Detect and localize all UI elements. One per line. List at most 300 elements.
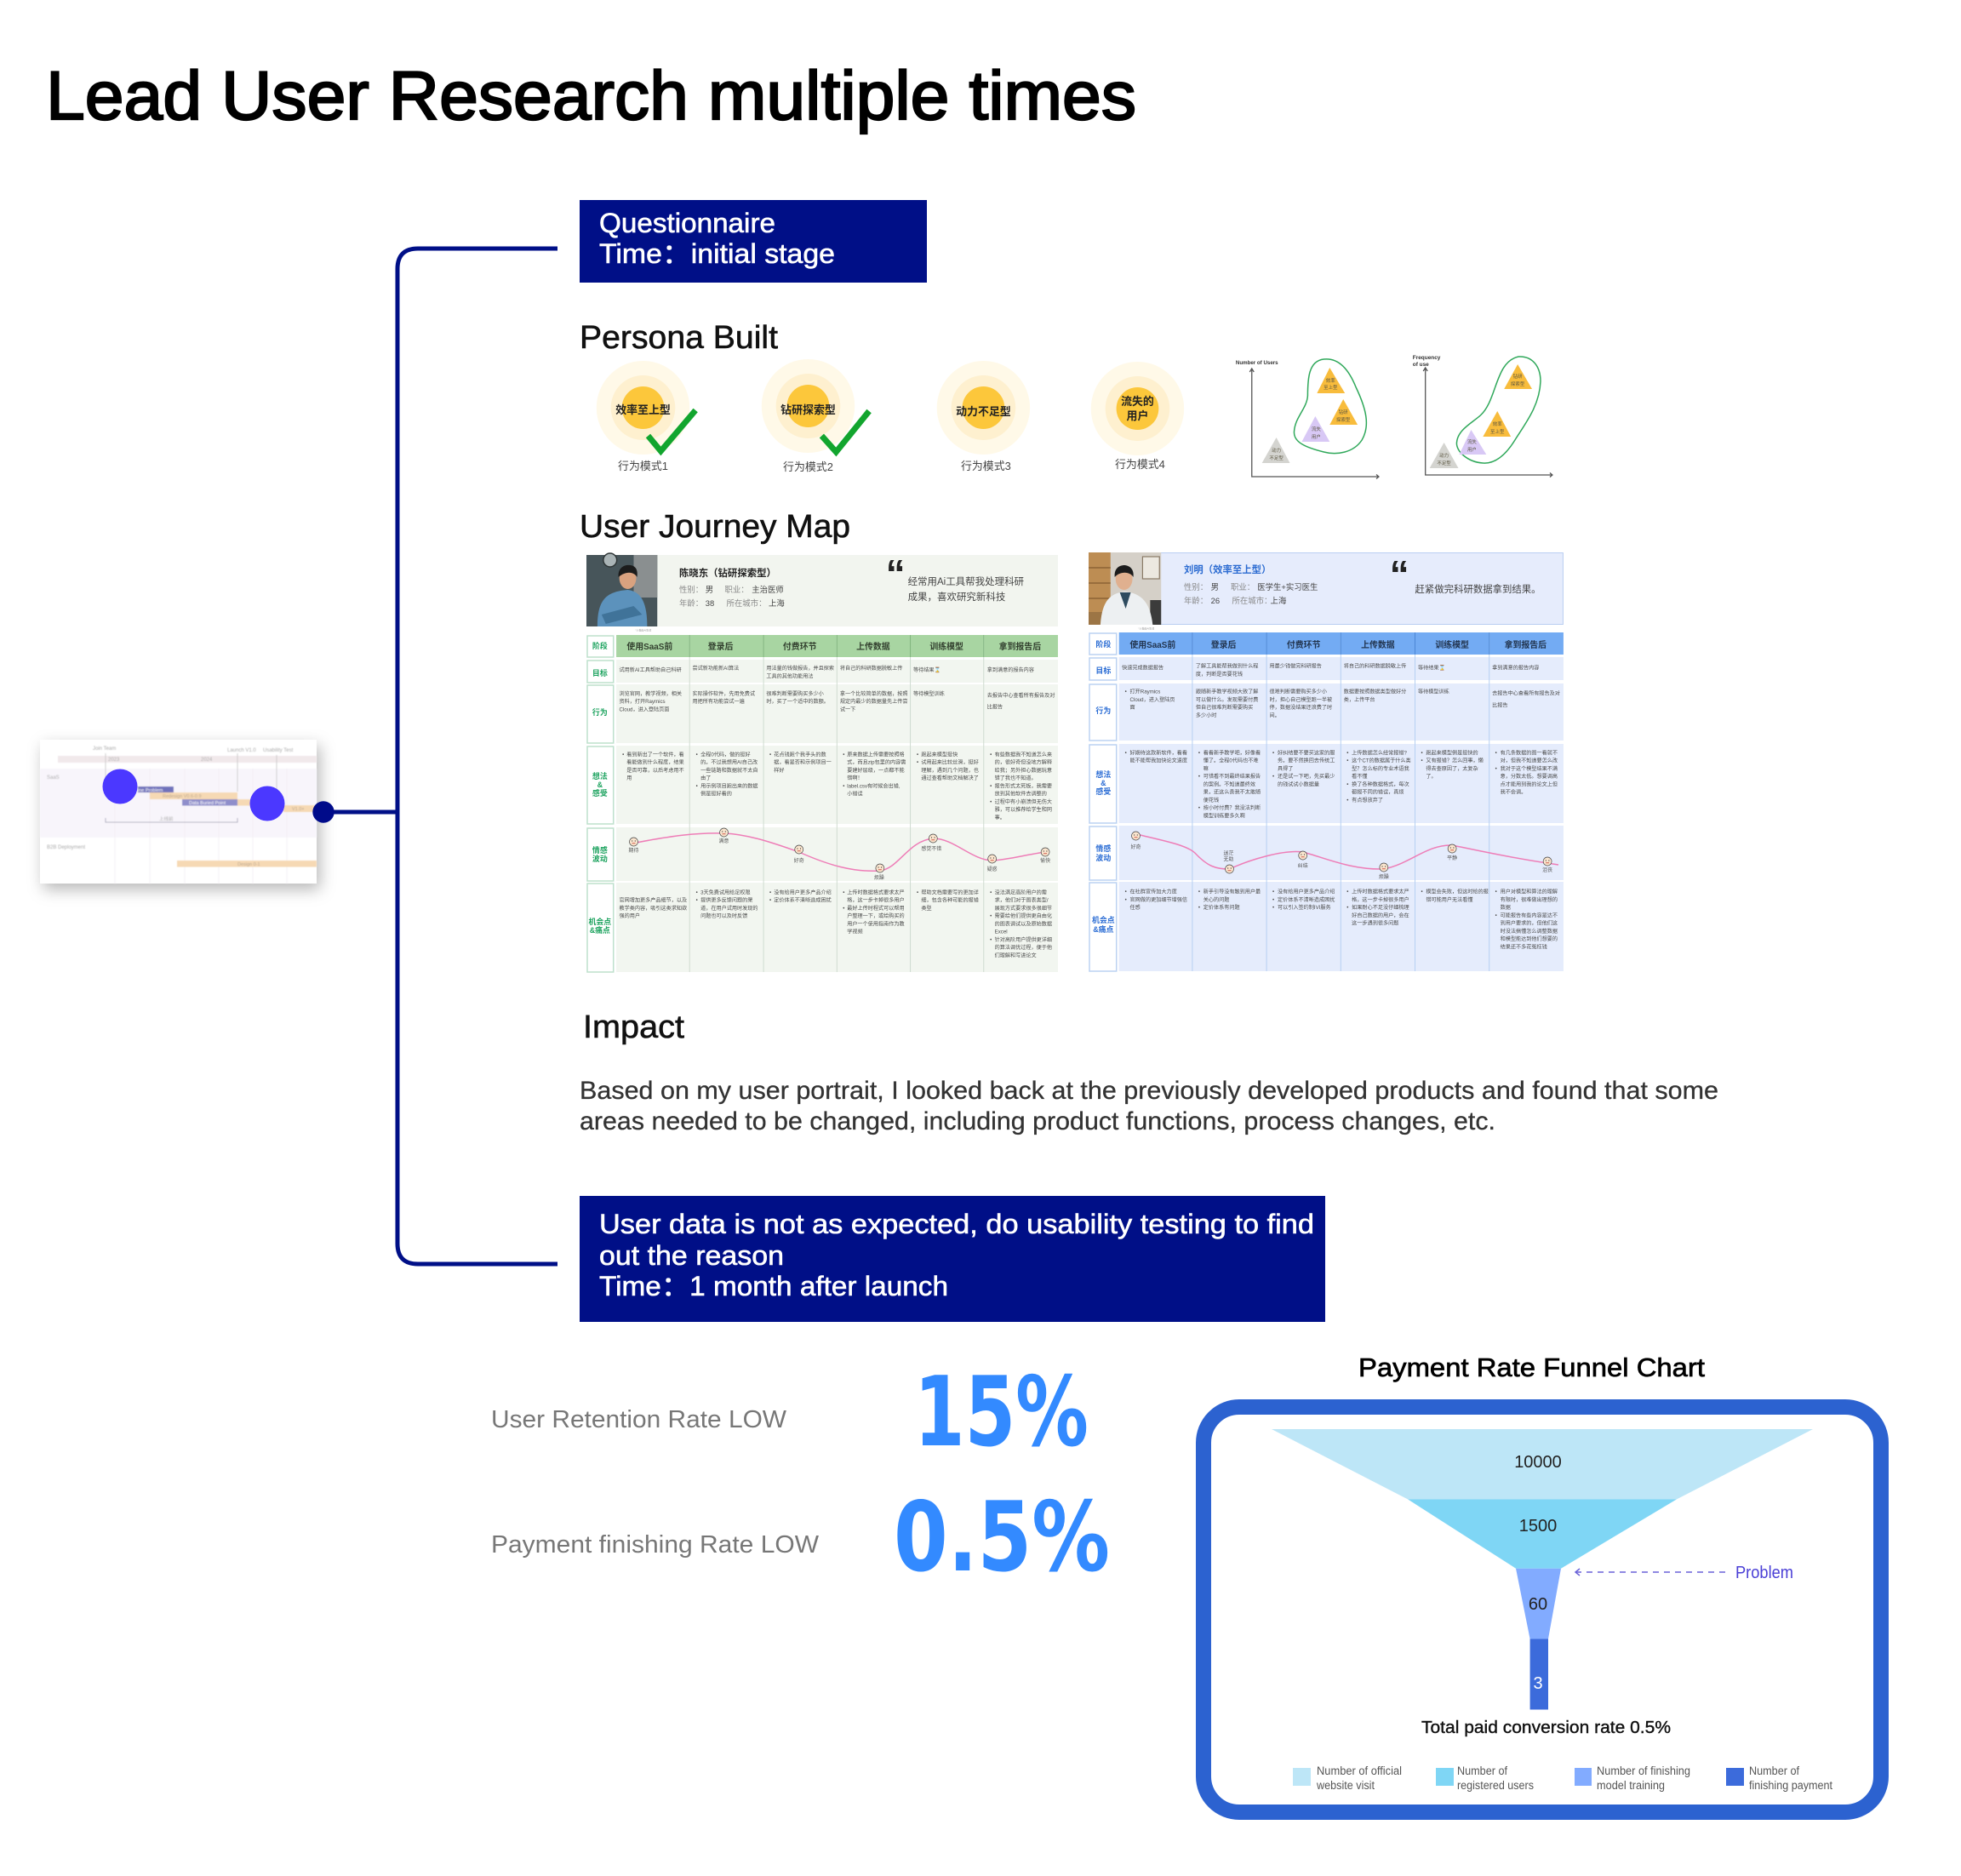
- row labels: 感受: [1095, 786, 1111, 796]
- persona badges: 流失的: [1121, 395, 1154, 408]
- behaviour row: 停，数据没结果还浪费了时: [1270, 704, 1332, 711]
- emotion curve: 期待: [629, 847, 638, 854]
- row labels: &: [597, 781, 603, 789]
- opportunities row: 数据: [1501, 904, 1511, 911]
- timeline thumbnail: Data Buried Point: [189, 801, 226, 806]
- goals row: 试用新AI工具帮助自己科研: [619, 666, 682, 673]
- thoughts row: 我不会调。: [1501, 789, 1526, 796]
- thoughts row: 有几条数据的图一看就不: [1501, 749, 1558, 756]
- opportunities row: •: [1272, 905, 1274, 911]
- behaviour row: [1125, 689, 1560, 719]
- thoughts row: 看看新手教学吧，好像看: [1203, 749, 1261, 756]
- emotion curve: 愉快: [1040, 857, 1050, 864]
- chart: number of users: 用户: [1312, 433, 1321, 440]
- chart: number of users: 钻研: [1339, 409, 1348, 415]
- thoughts row: •: [1272, 774, 1274, 780]
- funnel segments: 60: [1529, 1595, 1547, 1614]
- thoughts row: [1125, 749, 1558, 819]
- behaviour row: Cloud，进入登陆页: [1130, 696, 1175, 703]
- column headers: 训练模型: [1435, 639, 1469, 650]
- thoughts row: 果，还这么贵我不太敢随: [1203, 789, 1261, 796]
- legend: Number of finishing: [1597, 1764, 1690, 1777]
- opportunities row: 如果耐心不足没仔细梳理: [1352, 904, 1409, 911]
- opportunities row: •: [1272, 889, 1274, 895]
- thoughts row: 给我；另外担心数据玩意: [995, 767, 1052, 774]
- column headers: 登录后: [1211, 639, 1236, 650]
- opportunities row: 类型: [921, 905, 932, 912]
- opportunities row: •: [696, 889, 698, 895]
- opportunities row: 3天免费试用给足权限: [700, 889, 751, 895]
- behaviour row: 很难判断需要购买多少小: [766, 690, 824, 697]
- row labels: 情感: [1095, 844, 1111, 853]
- opportunities row: 格，这一步卡掉很多用户: [847, 896, 905, 904]
- persona badges: 钻研探索型: [780, 403, 836, 416]
- thoughts row: 看能做到什么程度，结果: [626, 758, 684, 766]
- journey table grid: [1089, 632, 1564, 971]
- title: Lead User Research multiple times: [46, 58, 1136, 134]
- thoughts row: 意，分数太低。想要调高: [1501, 773, 1558, 780]
- emotion curve: 沮丧: [1542, 867, 1552, 873]
- thoughts row: 有点想放弃了: [1352, 797, 1383, 804]
- opportunities row: •: [1421, 889, 1423, 895]
- persona badges: 行为模式4: [1115, 458, 1165, 471]
- opportunities row: 在社群宣传加大力度: [1130, 889, 1177, 895]
- goals row: 用法量的钱做报告，并且探索: [766, 665, 834, 672]
- emotion curve: 疑惑: [987, 866, 998, 872]
- behaviour row: 等待模型训练: [913, 690, 945, 697]
- row labels: 想法: [1095, 769, 1111, 779]
- goals row: 拿到满意的报告内容: [987, 666, 1034, 673]
- persona header: Chen Xiaodong: 主治医师: [752, 585, 784, 595]
- thoughts row: 用: [626, 775, 632, 781]
- journey map: blue persona: [1089, 552, 1564, 971]
- impact paragraph: [580, 1077, 1718, 1135]
- goals row: 将自己的科研数据脱敏上传: [1344, 663, 1406, 670]
- thoughts row: 能不能帮我加快论文速度: [1130, 758, 1187, 764]
- chart: frequency of use: 流失: [1467, 438, 1477, 445]
- chart: number of users: 不足型: [1269, 455, 1284, 461]
- thoughts row: 放到其他软件去调整的: [995, 790, 1047, 798]
- thoughts row: •: [1495, 750, 1497, 756]
- opportunities row: 上传时数据格式要求太严: [847, 889, 905, 895]
- opportunities row: •: [990, 937, 992, 943]
- funnel segments: 10000: [1514, 1453, 1562, 1472]
- thoughts row: 好纠结要不要买这家的服: [1278, 749, 1335, 756]
- persona header: Chen Xiaodong: “: [886, 552, 906, 596]
- timeline thumbnail: Usability Test: [263, 748, 294, 753]
- behaviour row: 间。: [1270, 712, 1280, 719]
- timeline thumbnail: Join Team: [93, 746, 116, 752]
- persona header: Chen Xiaodong: 成果，喜欢研究新科技: [908, 591, 1006, 603]
- persona header: Chen Xiaodong: 职业：: [725, 586, 749, 595]
- opportunities row: 官网做的更加细节增强信: [1130, 896, 1187, 903]
- thoughts row: [622, 751, 1052, 821]
- row labels: [589, 641, 611, 935]
- row labels: &: [1101, 779, 1106, 787]
- column headers: 拿到报告后: [1505, 639, 1547, 650]
- behaviour row: 打开Raymics: [1130, 689, 1160, 695]
- timeline thumbnail: V1.0+: [292, 807, 305, 812]
- persona header: Chen Xiaodong: *人像由AI生成: [635, 627, 651, 632]
- persona badges: [597, 359, 1184, 473]
- chart: frequency of use: 探索型: [1511, 380, 1525, 387]
- opportunities row: 时没法搞懂怎么调整数据: [1501, 928, 1558, 935]
- row labels: 目标: [1095, 666, 1111, 675]
- goals row: 尝试新功能新AI算法: [692, 665, 739, 672]
- callout: usability testing: [580, 1196, 1325, 1322]
- timeline thumbnail: Redesign V0.6-0.9: [163, 794, 202, 799]
- funnel segments: [1272, 1429, 1813, 1709]
- behaviour row: 试一下: [840, 706, 855, 712]
- persona header: Chen Xiaodong: 所在城市：: [727, 598, 766, 609]
- emotion curve: 无助: [1224, 855, 1233, 863]
- thoughts row: 了。: [1426, 774, 1437, 780]
- thoughts row: label.csv有时候会出错,: [847, 782, 900, 789]
- row labels: 波动: [592, 854, 608, 863]
- column headers: 使用SaaS前: [1129, 639, 1175, 650]
- persona header: Chen Xiaodong: 年龄：: [679, 598, 703, 609]
- thoughts row: 看到新出了一个软件，看: [626, 751, 684, 758]
- thoughts row: 过程中有小崩溃但无伤大: [995, 798, 1052, 805]
- goals row: 将自己的科研数据脱敏上传: [840, 665, 902, 672]
- callout: usability testing: User data is not as expected, do usability testing to find: [599, 1209, 1314, 1239]
- legend: Number of official: [1317, 1764, 1402, 1777]
- persona badges: 行为模式2: [783, 460, 833, 473]
- behaviour row: 多少小时: [1196, 712, 1216, 719]
- behaviour row: 浏览官网，教学视频，相关: [619, 690, 682, 697]
- goals row: [1122, 663, 1539, 678]
- opportunities row: 细，包含各种可能的报错: [921, 896, 979, 904]
- persona badges: 用户: [1127, 409, 1148, 422]
- opportunities row: 需要给他们提供更自由化: [995, 912, 1052, 919]
- opportunities row: •: [769, 889, 771, 895]
- row labels: 目标: [592, 668, 608, 678]
- behaviour row: 面: [1130, 705, 1135, 711]
- behaviour row: 资料，打开Raymics: [619, 698, 666, 705]
- thoughts row: •: [1421, 750, 1423, 756]
- opportunities row: [619, 889, 1052, 958]
- callout: questionnaire: Time：initial stage: [599, 238, 835, 269]
- timeline thumbnail: Launch V1.0: [227, 748, 256, 753]
- impact paragraph: Based on my user portrait, I looked back at the previously developed products and found that some: [580, 1077, 1718, 1105]
- row labels: 行为: [1095, 706, 1111, 715]
- behaviour row: 类，上传平台: [1344, 696, 1375, 703]
- thoughts row: 型？怎么标的专业术语我: [1352, 765, 1409, 772]
- journey map: green persona: [586, 552, 1058, 972]
- thoughts row: 看不懂: [1352, 773, 1368, 780]
- thoughts row: 小错误: [847, 790, 863, 798]
- thoughts row: •: [843, 752, 844, 758]
- thoughts row: 还是试一下吧，先买最少: [1278, 773, 1335, 780]
- persona badges: 行为模式3: [961, 460, 1011, 472]
- persona header: Liu Ming: 男: [1211, 583, 1219, 592]
- legend: Number of: [1749, 1764, 1799, 1777]
- thoughts row: 上传数据怎么经常报错?: [1352, 749, 1407, 756]
- legend: registered users: [1457, 1779, 1534, 1792]
- persona header: Liu Ming: 医学生+实习医生: [1257, 582, 1318, 592]
- chart: frequency of use: Frequency: [1413, 355, 1441, 361]
- persona header: Liu Ming: 上海: [1271, 596, 1287, 606]
- behaviour row: 可以做什么。发现需要付费: [1196, 696, 1258, 703]
- thoughts row: •: [1346, 750, 1348, 756]
- behaviour row: 时，担心自己模型跑一半被: [1270, 696, 1332, 703]
- emotion curve: 平静: [1447, 855, 1457, 861]
- row labels: &痛点: [590, 925, 610, 935]
- opportunities row: 学视频: [847, 928, 863, 935]
- callout: usability testing: out the reason: [599, 1240, 784, 1271]
- row labels: 想法: [592, 771, 608, 781]
- stat: user retention: [491, 1356, 1089, 1468]
- thoughts row: 这个CT的数据属于什么类: [1352, 758, 1411, 764]
- row labels: 机会点: [589, 917, 611, 926]
- behaviour row: •: [1125, 689, 1127, 695]
- thoughts row: 全程0代码，做的挺好: [700, 751, 751, 758]
- row labels: 机会点: [1092, 915, 1115, 924]
- opportunities row: •: [696, 897, 698, 904]
- thoughts row: 点才能用到我的论文上但: [1501, 781, 1558, 787]
- opportunities row: 错可能用户无法看懂: [1426, 896, 1473, 903]
- opportunities row: 上传时数据格式要求太严: [1352, 889, 1409, 895]
- goals row: [619, 665, 1034, 679]
- opportunities row: •: [1198, 905, 1200, 911]
- thoughts row: 跑起来模型挺快: [921, 751, 958, 758]
- chart: frequency of use: [1413, 355, 1552, 477]
- thoughts row: 据，看是否和示例项目一: [774, 758, 832, 766]
- thoughts row: 式，而且zip包里的内容需: [847, 758, 906, 766]
- opportunities row: 没法满足高阶用户的需: [995, 889, 1047, 895]
- problem annotation: [1575, 1564, 1793, 1582]
- column headers: 使用SaaS前: [626, 641, 672, 652]
- emotion curve: 迷茫: [1224, 849, 1233, 857]
- emotion curve: 烦躁: [874, 874, 884, 881]
- timeline thumbnail: SaaS: [47, 775, 60, 781]
- chart: number of users: 探索型: [1336, 416, 1351, 423]
- thoughts row: •: [1198, 805, 1200, 811]
- goals row: 用最少钱做完科研报告: [1270, 663, 1322, 670]
- thoughts row: 花点钱跑个我手头的数: [774, 751, 826, 758]
- opportunities row: 的图表调试以及原始数据: [995, 920, 1052, 927]
- behaviour row: 跟随新手教学视频大致了解: [1196, 689, 1258, 695]
- callout: questionnaire: Questionnaire: [599, 208, 775, 238]
- timeline thumbnail: 上线前: [159, 815, 174, 822]
- thoughts row: 换了各种数据格式，每次: [1352, 781, 1409, 787]
- persona badges: 行为模式1: [618, 460, 668, 472]
- thoughts row: 得去查原因了，太复杂: [1426, 765, 1478, 772]
- heading: user journey map: User Journey Map: [580, 509, 850, 545]
- persona badges: 动力不足型: [956, 405, 1011, 418]
- column headers: 付费环节: [783, 641, 817, 652]
- thoughts row: 又有报错？怎么回事，懒: [1426, 758, 1484, 764]
- opportunities row: 有限时，很难做出理想的: [1501, 896, 1558, 903]
- stat: payment finishing: 0.5%: [894, 1481, 1110, 1593]
- column headers: 上传数据: [1361, 639, 1395, 650]
- opportunities row: 户整理一下，或给购买的: [847, 912, 905, 919]
- thoughts row: •: [696, 783, 698, 789]
- opportunities row: 定价体系不清晰造成困扰: [774, 896, 832, 904]
- opportunities row: •: [1346, 889, 1348, 895]
- opportunities row: •: [990, 913, 992, 919]
- opportunities row: 们理解和写进论文: [995, 952, 1037, 958]
- opportunities row: •: [1495, 889, 1497, 895]
- behaviour row: [619, 690, 1055, 712]
- thoughts row: 的，很好奇但没地方解释: [995, 758, 1052, 766]
- persona header: Chen Xiaodong: [586, 552, 1058, 632]
- goals row: 拿到满意的报告内容: [1492, 665, 1539, 672]
- funnel segments: 3: [1533, 1674, 1543, 1693]
- persona header: Chen Xiaodong: 性别：: [679, 585, 703, 595]
- thoughts row: 按小时付费？我没法判断: [1203, 804, 1261, 811]
- column headers: 登录后: [708, 641, 733, 652]
- chart: number of users: 流失: [1312, 426, 1321, 432]
- thoughts row: 事。: [995, 814, 1005, 821]
- behaviour row: 规定内最少的数据量先上传尝: [840, 698, 908, 705]
- persona badges: 效率至上型: [615, 403, 671, 416]
- behaviour row: Cloud，进入登陆页面: [619, 706, 669, 712]
- behaviour row: 但自己很难判断需要购买: [1196, 704, 1253, 711]
- thoughts row: 报告形式太死板，我需要: [995, 782, 1052, 789]
- chart: number of users: 动力: [1272, 447, 1281, 454]
- behaviour row: 时，买了一个适中的数额。: [766, 698, 829, 705]
- column headers: 上传数据: [856, 641, 890, 652]
- thoughts row: •: [1346, 758, 1348, 764]
- thoughts row: •: [1346, 798, 1348, 804]
- stat: user retention: User Retention Rate LOW: [491, 1406, 787, 1433]
- chart: frequency of use: 效率: [1493, 420, 1502, 427]
- behaviour row: 去报告中心查看所有报告及对: [1492, 690, 1560, 697]
- thoughts row: 的案例。不知道最终效: [1203, 781, 1255, 787]
- behaviour row: 比报告: [1492, 701, 1508, 708]
- goals row: 快速完成数据报告: [1122, 665, 1163, 672]
- persona header: Liu Ming: 刘明（效率至上型）: [1184, 563, 1271, 575]
- chart: number of users: Number of Users: [1236, 360, 1278, 366]
- opportunities row: 到用户要求的，但他们这: [1501, 920, 1558, 927]
- emotion curve: [1131, 832, 1558, 880]
- opportunities row: 用户对模型和算法的理解: [1501, 889, 1558, 895]
- thoughts row: •: [622, 752, 624, 758]
- column headers: 训练模型: [929, 641, 963, 652]
- legend: website visit: [1316, 1779, 1375, 1792]
- chart: frequency of use: 动力: [1439, 452, 1449, 459]
- behaviour row: 实际操作软件，先用免费试: [692, 690, 755, 697]
- persona header: Chen Xiaodong: 上海: [769, 598, 785, 609]
- thoughts row: •: [769, 752, 771, 758]
- behaviour row: 数据要按照数据类型做好分: [1344, 689, 1406, 695]
- thoughts row: 对，但我不知道要怎么改: [1501, 758, 1558, 764]
- opportunities row: 和模型能达到他们想要的: [1501, 935, 1558, 942]
- emotion curve: 感觉不错: [921, 845, 941, 852]
- thoughts row: 有些数据我不知道怎么来: [995, 751, 1052, 758]
- thoughts row: •: [990, 799, 992, 805]
- timeline thumbnail: B2B Deployment: [47, 845, 85, 850]
- chart: number of users: 至上型: [1324, 384, 1338, 391]
- thoughts row: •: [1495, 766, 1497, 772]
- opportunities row: •: [769, 897, 771, 904]
- heading: persona built: Persona Built: [580, 320, 778, 356]
- opportunities row: 没有给用户更多产品介绍: [774, 889, 832, 895]
- opportunities row: 针对高阶用户提供更详细: [995, 936, 1052, 943]
- persona header: Liu Ming: “: [1390, 553, 1409, 597]
- opportunities row: 可以引入签约制IVI服务: [1278, 904, 1331, 911]
- timeline thumbnail: [40, 740, 334, 884]
- behaviour row: 用把所有功能尝试一遍: [692, 698, 745, 705]
- persona header: Liu Ming: 年龄：: [1184, 596, 1208, 606]
- opportunities row: 强的用户: [619, 912, 640, 919]
- legend: [1293, 1764, 1832, 1792]
- thoughts row: 务。要不然换回去传统工: [1278, 758, 1335, 764]
- opportunities row: 可能报告有些内容是达不: [1501, 912, 1558, 918]
- opportunities row: 没有给用户更多产品介绍: [1278, 889, 1335, 895]
- thoughts row: 错了我也不知道。: [995, 775, 1037, 781]
- persona header: Chen Xiaodong: 陈晓东（钻研探索型）: [679, 567, 776, 579]
- opportunities row: •: [1125, 897, 1127, 903]
- chart: frequency of use: 用户: [1467, 446, 1477, 453]
- column headers: 拿到报告后: [999, 641, 1041, 652]
- column headers: [626, 641, 1041, 652]
- behaviour row: 去报告中心查看所有报告及对: [987, 692, 1055, 699]
- opportunities row: 用户一个使用指南作为教: [847, 920, 905, 927]
- opportunities row: 求，他们对于图表类型/: [995, 896, 1049, 904]
- behaviour row: 比报告: [987, 704, 1003, 711]
- emotion curve: [629, 828, 1050, 881]
- goals row: 度，判断是否要花钱: [1196, 671, 1243, 678]
- journey table grid: [587, 635, 1058, 972]
- chart: frequency of use: of use: [1413, 362, 1429, 368]
- row labels: 行为: [592, 707, 608, 717]
- behaviour row: 等待模型训练: [1418, 689, 1449, 695]
- opportunities row: •: [1198, 889, 1200, 895]
- opportunities row: •: [1346, 905, 1348, 911]
- thoughts row: 具得了: [1278, 765, 1293, 772]
- chart: frequency of use: 不足型: [1437, 460, 1451, 466]
- opportunities row: 展现方式要求很多很细节: [995, 905, 1052, 912]
- legend: finishing payment: [1749, 1779, 1832, 1792]
- thoughts row: •: [917, 759, 918, 766]
- funnel panel: [1203, 1407, 1881, 1812]
- opportunities row: 结果还不多花冤枉钱: [1501, 943, 1547, 950]
- timeline thumbnail: 2023: [108, 758, 120, 763]
- thoughts row: 由了: [700, 775, 711, 781]
- opportunities row: 最好上传时程式可以帮用: [847, 905, 905, 912]
- thoughts row: 便花钱: [1203, 797, 1219, 804]
- chart: number of users: 效率: [1326, 377, 1335, 384]
- goals row: 工具的其他功能用法: [766, 672, 814, 679]
- row labels: 波动: [1095, 853, 1111, 862]
- behaviour row: 拿一个比较简单的数据，按照: [840, 690, 908, 697]
- persona header: Liu Ming: 赶紧做完科研数据拿到结果。: [1415, 583, 1541, 595]
- column headers: 付费环节: [1287, 639, 1321, 650]
- goals row: 了解工具能帮我做到什么程: [1196, 663, 1258, 670]
- chart: frequency of use: 至上型: [1490, 428, 1505, 435]
- opportunities row: 这一步遇到很多问题: [1352, 920, 1398, 927]
- opportunities row: 教学类内容，吸引这类求知欲: [619, 905, 687, 912]
- thoughts row: •: [696, 752, 698, 758]
- funnel segments: 1500: [1519, 1517, 1557, 1536]
- opportunities row: •: [843, 889, 844, 895]
- emotion curve: 好奇: [1131, 844, 1141, 850]
- stat: payment finishing: Payment finishing Rate LOW: [491, 1531, 820, 1559]
- persona header: Liu Ming: 职业：: [1231, 583, 1255, 592]
- opportunities row: •: [1272, 897, 1274, 903]
- thoughts row: •: [843, 783, 844, 789]
- opportunities row: •: [990, 889, 992, 895]
- row labels: 阶段: [592, 641, 608, 650]
- opportunities row: 官网增加更多产品细节，以及: [619, 897, 687, 904]
- thoughts row: 理解，遇到几个问题，也: [921, 767, 979, 774]
- thoughts row: 模型训练要多久啊: [1203, 812, 1245, 819]
- problem annotation: Problem: [1735, 1564, 1793, 1582]
- funnel heading: Payment Rate Funnel Chart: [1358, 1353, 1705, 1382]
- thoughts row: •: [1421, 758, 1423, 764]
